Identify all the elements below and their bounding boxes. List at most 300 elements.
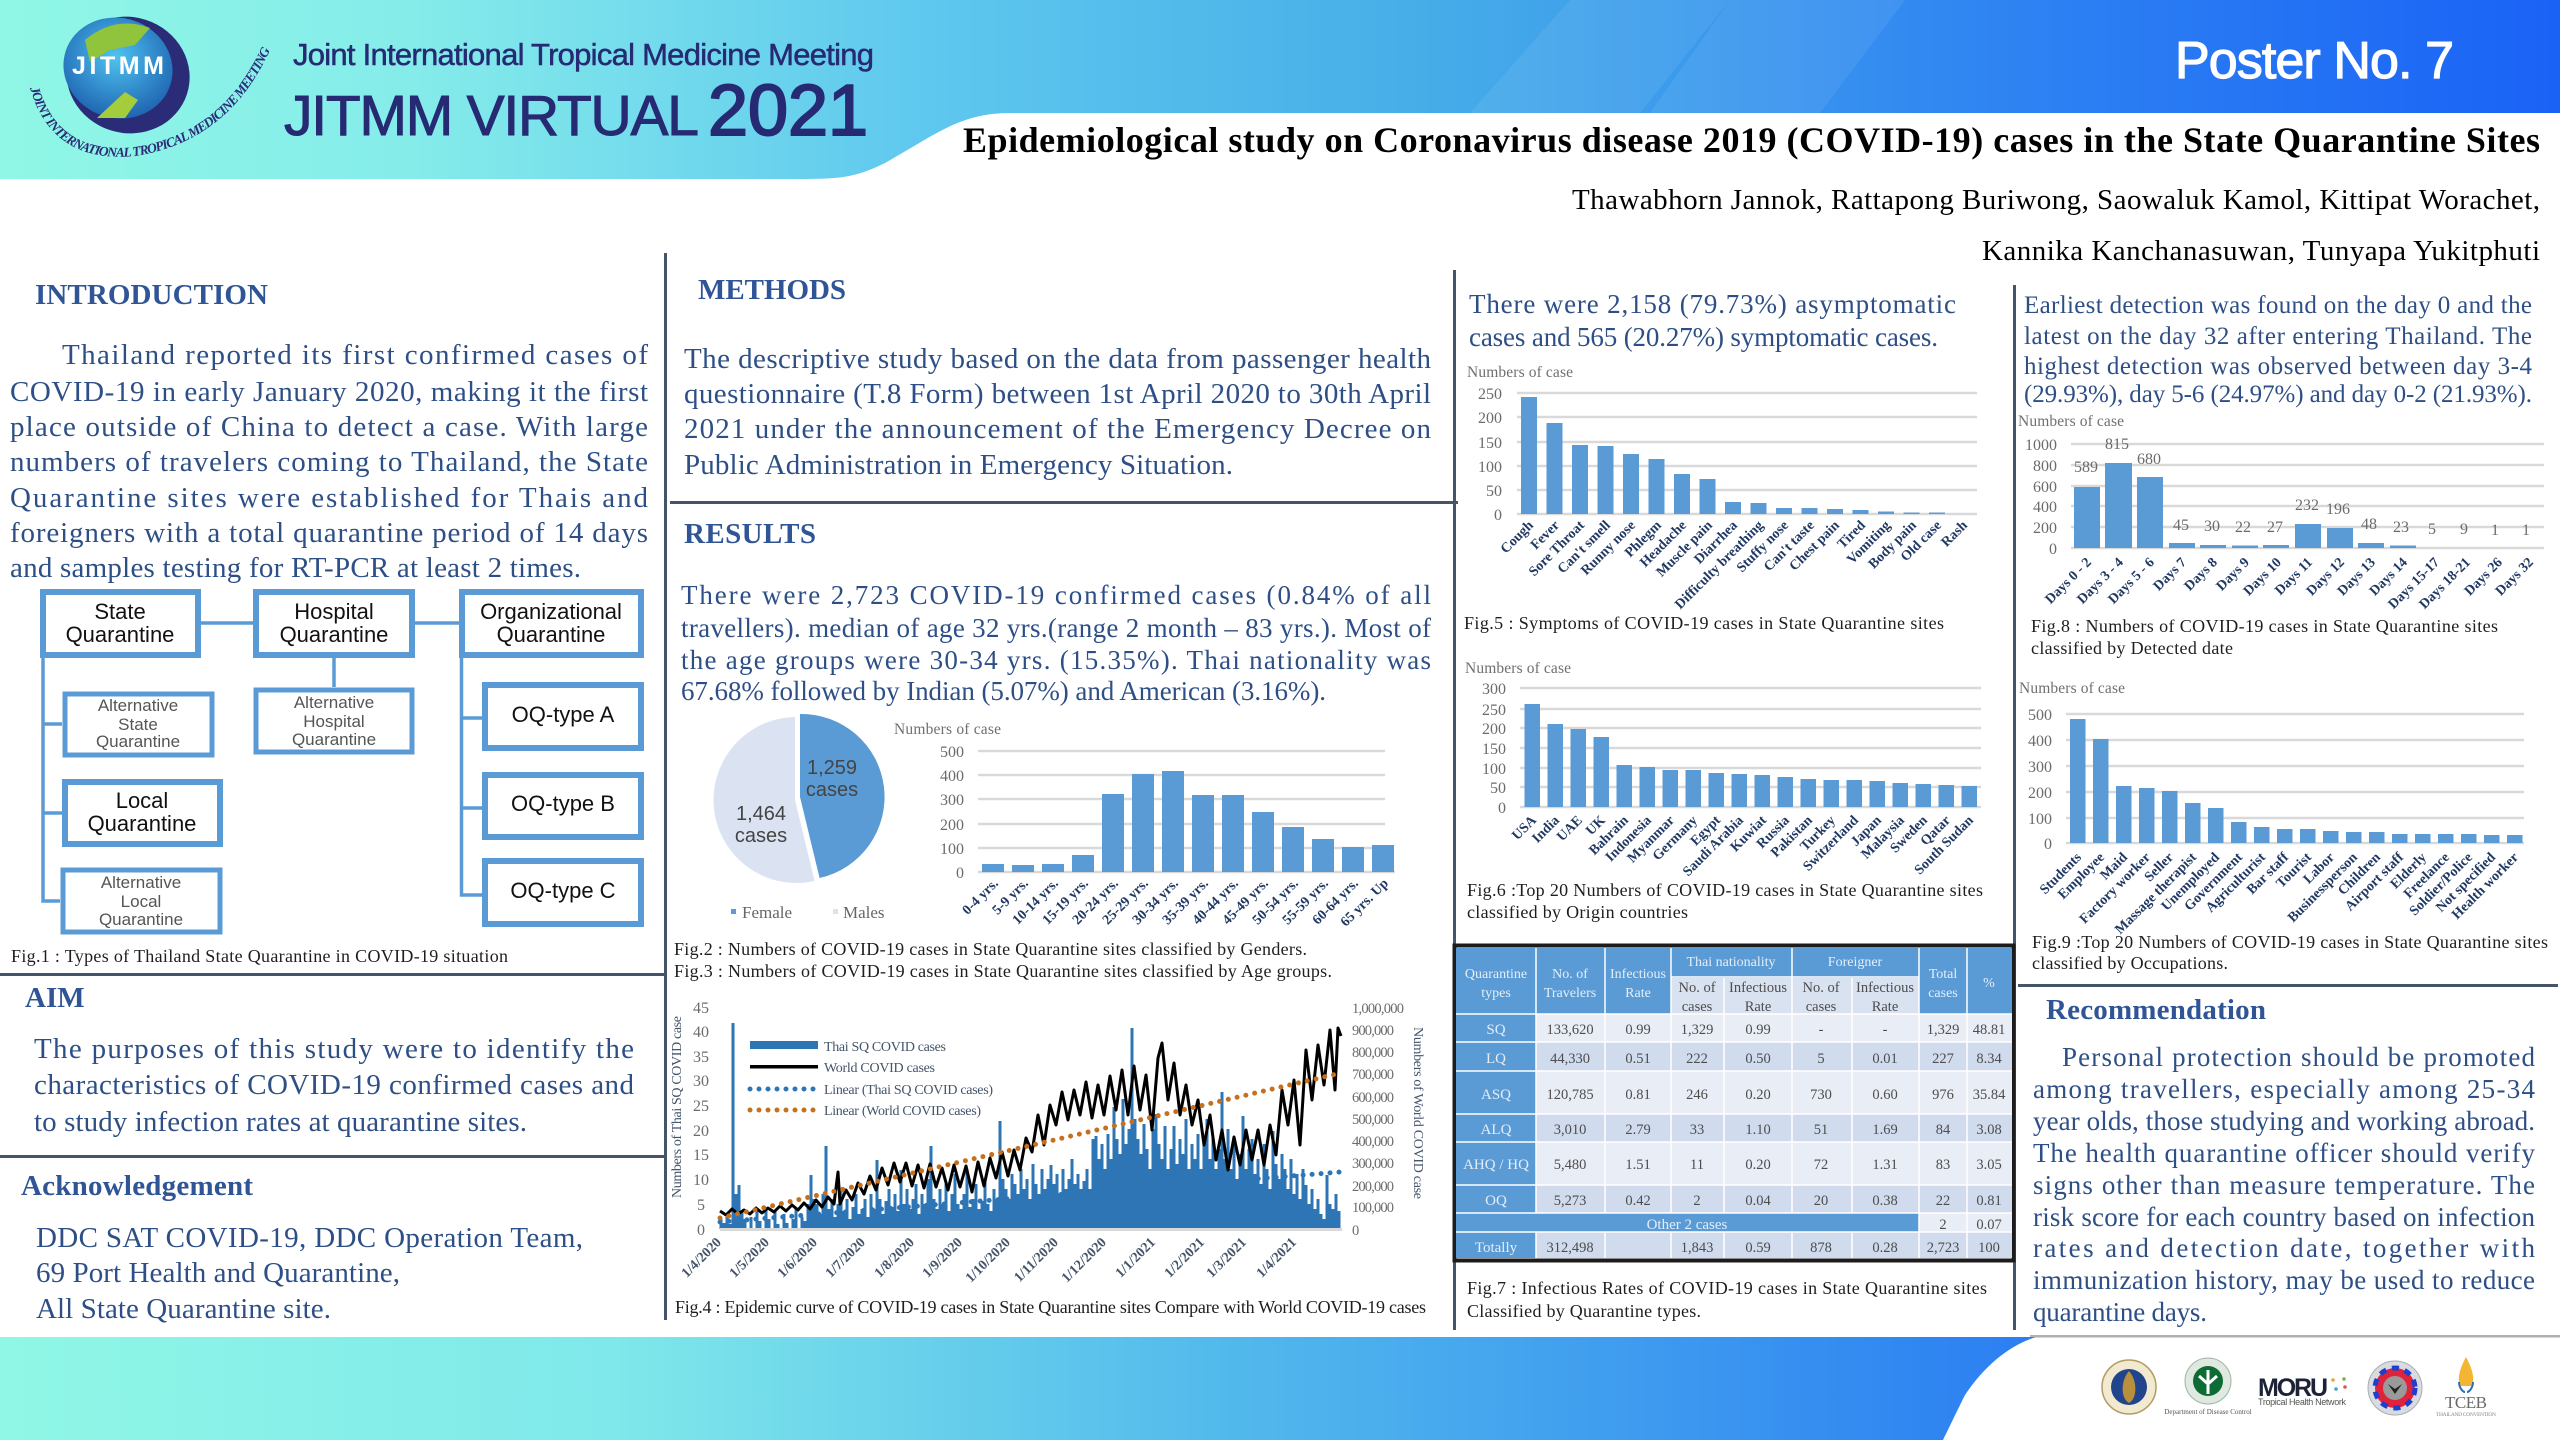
table header: Thai nationality xyxy=(1686,955,1776,970)
chart: symptoms bars: Numbers of case xyxy=(1467,364,1573,381)
table body: 2 xyxy=(1939,1217,1947,1233)
table body: 1,329 xyxy=(1681,1022,1713,1038)
data labels: detected date: 9 xyxy=(2460,521,2468,538)
box: organizational quarantine: Quarantine xyxy=(497,622,605,647)
table body: 72 xyxy=(1814,1157,1828,1173)
axis: right ticks: 700,000 xyxy=(1352,1067,1394,1083)
text: introduction body xyxy=(10,339,648,584)
panel: recommendation xyxy=(2033,994,2536,1327)
chart: origin countries bars: USA xyxy=(1509,813,1540,844)
axis: right ticks: 800,000 xyxy=(1352,1045,1394,1061)
chart: origin countries bars: Turkey xyxy=(1798,813,1839,854)
table header: No. of xyxy=(1552,967,1588,982)
bars: Thai SQ cases xyxy=(721,1023,1339,1229)
chart: symptoms bars: 0 xyxy=(1494,507,1502,524)
axis: left ticks: 0 xyxy=(697,1222,705,1239)
table body: 51 xyxy=(1814,1122,1828,1138)
authors xyxy=(1572,184,2540,267)
axis: left ticks: 15 xyxy=(693,1147,709,1164)
table body: 2.79 xyxy=(1625,1122,1651,1138)
axis: right ticks: 500,000 xyxy=(1352,1112,1394,1128)
chart: origin countries bars: 150 xyxy=(1482,741,1506,758)
table body: 0.51 xyxy=(1625,1051,1651,1067)
axis: left ticks: 10 xyxy=(693,1172,709,1189)
chart: symptoms bars: 150 xyxy=(1478,435,1502,452)
table body: 84 xyxy=(1936,1122,1951,1138)
chart: age group bars: 30-34 yrs. xyxy=(1130,876,1182,928)
box: alternative local quarantine: Local xyxy=(121,892,161,911)
chart: age group bars: 60-64 yrs. xyxy=(1310,876,1362,928)
box: alternative local quarantine xyxy=(63,870,220,932)
chart: symptoms bars: 250 xyxy=(1478,386,1502,403)
chart: origin countries bars: Japan xyxy=(1848,813,1885,850)
bars: dense base of Thai SQ cases xyxy=(1003,1168,1341,1229)
text: recommendation body xyxy=(2033,1042,2536,1327)
chart: gender pie: 1,259 xyxy=(807,757,857,779)
box: local quarantine xyxy=(65,782,220,844)
table: infection rates: Infectious xyxy=(1856,980,1914,996)
text: methods body: Public Administration in Emergency Situation. xyxy=(684,449,1233,481)
chart: occupations bars: Seller xyxy=(2142,850,2177,885)
chart: occupations bars: 500 xyxy=(2028,707,2052,724)
panel: introduction xyxy=(10,279,648,966)
chart: origin countries bars: 50 xyxy=(1490,780,1506,797)
table body: 0.99 xyxy=(1625,1022,1651,1038)
data labels: detected date: 45 xyxy=(2173,517,2189,534)
text: detection summary: latest on the day 32 after entering Thailand. The xyxy=(2024,323,2532,350)
table body: 0.81 xyxy=(1625,1087,1651,1103)
chart: symptoms bars: Old case xyxy=(1898,518,1945,565)
data labels: detected date: 27 xyxy=(2267,519,2283,536)
chart: origin countries bars: Kuwiat xyxy=(1728,813,1770,855)
chart: occupations bars: Factory worker xyxy=(2077,850,2154,927)
table row labels: LQ xyxy=(1486,1051,1506,1067)
chart: detected date bars: Days 7 xyxy=(2151,555,2190,594)
trend: Thai SQ linear xyxy=(720,1172,1341,1222)
diagram: quarantine types xyxy=(43,592,641,932)
table body: 20 xyxy=(1814,1193,1828,1209)
text: recommendation body: The health quarantine officer should verify xyxy=(2033,1138,2536,1168)
table body: 246 xyxy=(1686,1087,1708,1103)
chart: origin countries bars: Switzerland xyxy=(1801,813,1862,874)
panel: symptoms xyxy=(1454,289,2014,1321)
legend: epidemic curve: Linear (World COVID cases) xyxy=(824,1104,981,1119)
chart: detected date bars: Days 5 - 6 xyxy=(2106,555,2158,607)
box: alternative hospital quarantine xyxy=(256,690,412,752)
chart: origin countries bars: Numbers of case xyxy=(1465,660,1571,677)
text: recommendation body: risk score for each country based on infection xyxy=(2033,1202,2536,1232)
chart: age group bars: 400 xyxy=(940,768,964,785)
chart: origin countries bars: 100 xyxy=(1482,761,1506,778)
axis: date labels: 1/3/2021 xyxy=(1204,1235,1250,1281)
chart: age group bars: 5-9 yrs. xyxy=(990,876,1032,918)
box: state quarantine: State xyxy=(94,599,146,624)
caption: fig 6: classified by Origin countries xyxy=(1467,902,1688,922)
data labels: detected date: 196 xyxy=(2326,501,2350,518)
text: recommendation body: Personal protection should be promoted xyxy=(2062,1042,2536,1072)
table body: 0.20 xyxy=(1745,1157,1771,1173)
chart: origin countries bars: Myanmar xyxy=(1625,813,1678,866)
chart: occupations bars: Airport staff xyxy=(2343,850,2407,914)
chart: origin countries bars: UAE xyxy=(1554,813,1586,845)
table body xyxy=(1546,1022,2006,1256)
axis: left ticks xyxy=(693,1000,709,1239)
text: acknowledgement body: All State Quarantine site. xyxy=(36,1293,331,1325)
table: infection rates xyxy=(1454,946,2014,1260)
table body: 8.34 xyxy=(1976,1051,2002,1067)
chart: detected date bars: Days 8 xyxy=(2182,555,2221,594)
table body: 0.20 xyxy=(1745,1087,1771,1103)
chart: occupations bars: Elderly xyxy=(2388,850,2430,892)
table body: 48.81 xyxy=(1973,1022,2005,1038)
chart: origin countries bars: Germany xyxy=(1650,813,1701,864)
table body: 22 xyxy=(1936,1193,1950,1209)
table body: 2 xyxy=(1693,1193,1701,1209)
table body: 0.04 xyxy=(1745,1193,1771,1209)
text: recommendation body: among travellers, especially among 25-34 xyxy=(2033,1074,2536,1104)
chart: origin countries bars: 250 xyxy=(1482,702,1506,719)
data labels: detected date: 1 xyxy=(2491,522,2499,539)
table body: 0.07 xyxy=(1976,1217,2002,1233)
box: OQ-type A: OQ-type A xyxy=(512,702,615,727)
table body: 312,498 xyxy=(1546,1240,1594,1256)
chart: gender pie: 1,464 xyxy=(736,803,786,825)
chart: origin countries bars: Indonesia xyxy=(1603,813,1655,865)
caption: fig 8: Fig.8 : Numbers of COVID-19 cases in State Quarantine sites xyxy=(2031,616,2498,636)
data labels: detected date: 232 xyxy=(2295,497,2319,514)
table body: 3.08 xyxy=(1976,1122,2002,1138)
table body: 33 xyxy=(1690,1122,1704,1138)
caption: fig 7: Fig.7 : Infectious Rates of COVID-19 cases in State Quarantine sites xyxy=(1467,1278,1987,1298)
legend: gender: Males xyxy=(843,903,885,922)
chart: detected date bars: Days 9 xyxy=(2214,555,2253,594)
caption: fig 8: classified by Detected date xyxy=(2031,638,2233,658)
chart: symptoms bars: Body pain xyxy=(1866,518,1920,572)
table body: 730 xyxy=(1810,1087,1832,1103)
caption: figs 2 and 3: Fig.3 : Numbers of COVID-19 cases in State Quarantine sites classified by Age groups. xyxy=(674,961,1332,981)
table body: 120,785 xyxy=(1546,1087,1594,1103)
table body: 0.28 xyxy=(1872,1240,1898,1256)
chart: age group bars: 40-44 yrs. xyxy=(1190,876,1242,928)
table header: Total xyxy=(1929,967,1957,982)
chart: age group bars: 50-54 yrs. xyxy=(1250,876,1302,928)
chart: age group bars: 0 xyxy=(956,865,964,882)
chart: age group bars: 0-4 yrs. xyxy=(960,876,1002,918)
logo: TCEB: THAILAND CONVENTION xyxy=(2436,1412,2496,1418)
caption: fig 1: Fig.1 : Types of Thailand State Quarantine in COVID-19 situation xyxy=(11,946,508,966)
table header: types xyxy=(1481,986,1511,1001)
box: alternative hospital quarantine: Hospital xyxy=(303,712,365,731)
chart: origin countries bars: 200 xyxy=(1482,721,1506,738)
axis: right ticks: 300,000 xyxy=(1352,1156,1394,1172)
table body: 1,329 xyxy=(1927,1022,1959,1038)
legend: gender: Female xyxy=(742,903,792,922)
chart: age group bars xyxy=(894,721,1395,930)
box: alternative state quarantine: Alternative xyxy=(98,696,178,715)
text: recommendation body: year olds, those studying and working abroad. xyxy=(2033,1106,2535,1136)
box: hospital quarantine: Hospital xyxy=(294,599,374,624)
table body: 976 xyxy=(1932,1087,1954,1103)
chart: detected date bars: Days 13 xyxy=(2335,555,2379,599)
text: acknowledgement body: DDC SAT COVID-19, DDC Operation Team, xyxy=(36,1222,583,1254)
table body: 0.50 xyxy=(1745,1051,1771,1067)
data labels: detected date: 48 xyxy=(2361,516,2377,533)
table row labels: AHQ / HQ xyxy=(1463,1157,1529,1173)
axis: left ticks: 45 xyxy=(693,1000,709,1017)
text: aim body: to study infection rates at quarantine sites. xyxy=(34,1106,527,1138)
chart: occupations bars: 300 xyxy=(2028,759,2052,776)
caption: fig 9: Fig.9 :Top 20 Numbers of COVID-19 cases in State Quarantine sites xyxy=(2032,932,2548,952)
chart: detected date bars: Days 3 - 4 xyxy=(2075,555,2127,607)
table body: 35.84 xyxy=(1973,1087,2006,1103)
table body: 100 xyxy=(1978,1240,2000,1256)
chart: symptoms bars: Stuffy nose xyxy=(1734,518,1792,576)
caption: fig 9: classified by Occupations. xyxy=(2032,953,2228,973)
box: OQ-type C xyxy=(485,861,641,924)
event title: JITMM VIRTUAL xyxy=(284,84,699,148)
chart: symptoms bars: Vomiting xyxy=(1845,518,1894,568)
chart: occupations bars: Employee xyxy=(2055,850,2108,903)
text: recommendation body: quarantine days. xyxy=(2033,1297,2207,1327)
chart: detected date bars: 600 xyxy=(2033,479,2057,496)
table header xyxy=(1465,955,1995,1001)
chart: occupations bars: Not specified xyxy=(2433,850,2499,916)
axis: date labels: 1/6/2020 xyxy=(775,1235,821,1281)
chart: origin countries bars: Egypt xyxy=(1688,813,1724,849)
chart: detected date bars: 800 xyxy=(2033,458,2057,475)
box: alternative hospital quarantine: Alternative xyxy=(294,693,374,712)
table row labels: ALQ xyxy=(1481,1122,1512,1138)
chart: occupations bars xyxy=(2019,680,2524,938)
table header: Infectious xyxy=(1610,967,1666,982)
box: organizational quarantine: Organizational xyxy=(480,599,622,624)
chart: symptoms bars: Can't smell xyxy=(1555,518,1614,577)
table: infection rates: cases xyxy=(1682,999,1713,1015)
table body: 44,330 xyxy=(1550,1051,1590,1067)
chart: symptoms bars: Rash xyxy=(1939,518,1971,550)
axis: right ticks: 0 xyxy=(1352,1223,1359,1239)
poster number: Poster No. 7 xyxy=(2175,32,2454,90)
table body: 83 xyxy=(1936,1157,1950,1173)
axis: date labels: 1/12/2020 xyxy=(1059,1235,1110,1286)
chart: occupations bars: Health worker xyxy=(2449,850,2522,923)
axis: left ticks: 5 xyxy=(697,1197,705,1214)
axis: right ticks: 600,000 xyxy=(1352,1090,1394,1106)
text: introduction body: COVID-19 in early January 2020, making it the first xyxy=(10,376,648,408)
caption: fig 7 xyxy=(1467,1278,1987,1321)
legend: epidemic curve xyxy=(750,1040,993,1119)
chart: detected date bars: Days 18-21 xyxy=(2417,555,2474,612)
chart: symptoms bars: Chest pain xyxy=(1787,518,1843,574)
chart: origin countries bars xyxy=(1465,660,1981,880)
table body: - xyxy=(1819,1022,1824,1038)
heading: recommendation: Recommendation xyxy=(2046,994,2266,1026)
logo: department seal xyxy=(2164,1358,2252,1416)
event year: 2021 xyxy=(708,71,868,151)
box: local quarantine: Local xyxy=(116,788,168,813)
axis: date labels: 1/4/2020 xyxy=(679,1235,725,1281)
chart: age group bars: 45-49 yrs. xyxy=(1220,876,1272,928)
text: results body: travellers). median of age 32 yrs.(range 2 month – 83 yrs.). Most of xyxy=(681,613,1431,643)
table body: - xyxy=(1883,1022,1888,1038)
chart: occupations bars: 400 xyxy=(2028,733,2052,750)
chart: detected date bars: Days 32 xyxy=(2493,555,2537,599)
chart: origin countries bars: South Sudan xyxy=(1912,813,1977,878)
data labels: detected date: 1 xyxy=(2522,522,2530,539)
text: methods body: questionnaire (T.8 Form) between 1st April 2020 to 30th April xyxy=(684,378,1431,410)
table body: 1,843 xyxy=(1681,1240,1713,1256)
table row labels: ASQ xyxy=(1481,1087,1511,1103)
chart: age group bars: Numbers of case xyxy=(894,721,1001,738)
axis: right ticks: 200,000 xyxy=(1352,1179,1394,1195)
table body: 1.10 xyxy=(1745,1122,1771,1138)
data labels: detected date: 22 xyxy=(2235,519,2251,536)
logo: MORU: MORU xyxy=(2258,1374,2328,1402)
chart: age group bars: 35-39 yrs. xyxy=(1160,876,1212,928)
text: acknowledgement body xyxy=(36,1222,583,1325)
chart: age group bars: 500 xyxy=(940,744,964,761)
axis: right ticks: 900,000 xyxy=(1352,1023,1394,1039)
logo: MORU: Tropical Health Network xyxy=(2258,1397,2346,1407)
box: alternative local quarantine: Quarantine xyxy=(99,910,183,929)
data labels: detected date: 23 xyxy=(2393,519,2409,536)
chart: detected date bars xyxy=(2018,413,2544,612)
heading: aim: AIM xyxy=(25,982,85,1014)
box: state quarantine: Quarantine xyxy=(66,622,174,647)
axis: left ticks: 20 xyxy=(693,1123,709,1140)
table body: 0.99 xyxy=(1745,1022,1771,1038)
box: OQ-type A xyxy=(485,685,641,748)
text: methods body: 2021 under the announcement of the Emergency Decree on xyxy=(684,413,1432,445)
caption: fig 4: Fig.4 : Epidemic curve of COVID-19 cases in State Quarantine sites Compare with World COVID-19 cases xyxy=(675,1297,1426,1317)
table body: 222 xyxy=(1686,1051,1708,1067)
data labels: detected date: 680 xyxy=(2137,451,2161,468)
box: alternative state quarantine xyxy=(65,694,212,755)
axis: date labels: 1/10/2020 xyxy=(963,1235,1014,1286)
box: hospital quarantine: Quarantine xyxy=(280,622,388,647)
chart: symptoms bars: 50 xyxy=(1486,483,1502,500)
data labels: detected date: 589 xyxy=(2074,459,2098,476)
chart: symptoms bars: Difficulty breathing xyxy=(1673,518,1767,613)
table: infection rates: Rate xyxy=(1872,999,1898,1015)
chart: age group bars: 20-24 yrs. xyxy=(1070,876,1122,928)
panel: methods xyxy=(684,274,1432,481)
table body: 1.51 xyxy=(1625,1157,1651,1173)
chart: symptoms bars: 200 xyxy=(1478,410,1502,427)
chart: symptoms bars: Muscle pain xyxy=(1654,518,1716,580)
logo: JITMM globe: JITMM xyxy=(72,52,164,80)
chart: occupations bars: 0 xyxy=(2044,836,2052,853)
chart: detected date bars: Days 0 - 2 xyxy=(2043,555,2095,607)
footer banner xyxy=(0,1335,2560,1440)
axis: right ticks: 1,000,000 xyxy=(1352,1001,1404,1017)
table row labels: OQ xyxy=(1485,1193,1507,1209)
text: introduction body: and samples testing for RT-PCR at least 2 times. xyxy=(10,552,581,584)
heading: results: RESULTS xyxy=(684,518,816,550)
text: introduction body: Quarantine sites were established for Thais and xyxy=(10,482,648,514)
chart: symptoms bars: Fever xyxy=(1528,518,1563,553)
chart: age group bars: 10-14 yrs. xyxy=(1010,876,1062,928)
chart: age group bars: 200 xyxy=(940,817,964,834)
axis: date labels: 1/7/2020 xyxy=(823,1235,869,1281)
table body: 0.38 xyxy=(1872,1193,1898,1209)
panel: aim xyxy=(25,982,634,1138)
text: methods body: The descriptive study based on the data from passenger health xyxy=(684,343,1432,375)
axis: right ticks: 100,000 xyxy=(1352,1200,1394,1216)
text: introduction body: numbers of travelers coming to Thailand, the State xyxy=(10,446,648,478)
table row labels: Totally xyxy=(1475,1240,1518,1256)
panel: detection and occupations xyxy=(2018,292,2548,973)
table body: 5,480 xyxy=(1554,1157,1586,1173)
box: alternative hospital quarantine: Quarantine xyxy=(292,730,376,749)
table body: 3.05 xyxy=(1976,1157,2002,1173)
heading: introduction: INTRODUCTION xyxy=(35,279,268,311)
table body: 5 xyxy=(1817,1051,1825,1067)
chart: origin countries bars: 300 xyxy=(1482,681,1506,698)
table: infection rates: Infectious xyxy=(1729,980,1787,996)
axis title: right: Numbers of World COVID case xyxy=(1410,1027,1425,1199)
table: infection rates: Rate xyxy=(1745,999,1771,1015)
chart: symptoms bars: Can't taste xyxy=(1761,518,1818,575)
text: detection summary: (29.93%), day 5-6 (24.97%) and day 0-2 (21.93%). xyxy=(2024,381,2532,408)
chart: occupations bars: Soldier/Police xyxy=(2407,850,2476,919)
trend: world linear xyxy=(720,1073,1341,1218)
logo: JITMM globe: JOINT INTERNATIONAL TROPICAL MEDICINE MEETING xyxy=(30,46,270,157)
table body: 1.69 xyxy=(1872,1122,1898,1138)
box: state quarantine xyxy=(43,592,198,655)
box: OQ-type B: OQ-type B xyxy=(511,791,615,816)
caption: fig 7: Classified by Quarantine types. xyxy=(1467,1301,1701,1321)
table header: Foreigner xyxy=(1828,955,1883,970)
chart: gender pie: cases xyxy=(806,779,858,801)
table body: 2,723 xyxy=(1927,1240,1959,1256)
chart: occupations bars: 200 xyxy=(2028,785,2052,802)
text: detection summary: highest detection was observed between day 3-4 xyxy=(2024,353,2532,380)
chart: gender pie xyxy=(714,714,885,922)
table body: 227 xyxy=(1932,1051,1954,1067)
caption: fig 9 xyxy=(2032,932,2548,973)
chart: origin countries bars: Saudi Arabia xyxy=(1680,813,1747,880)
chart: epidemic curve xyxy=(670,1000,1425,1286)
chart: occupations bars: Businessperson xyxy=(2285,850,2361,926)
box: OQ-type B xyxy=(485,775,641,837)
chart: symptoms bars: Headache xyxy=(1637,518,1690,571)
chart: origin countries bars: India xyxy=(1530,813,1563,846)
axis: date labels: 1/2/2021 xyxy=(1162,1235,1208,1281)
caption: figs 2 and 3: Fig.2 : Numbers of COVID-19 cases in State Quarantine sites classified by Genders. xyxy=(674,939,1307,959)
chart: symptoms bars xyxy=(1467,364,1977,613)
chart: symptoms bars: 100 xyxy=(1478,459,1502,476)
logo: TCEB xyxy=(2436,1357,2496,1418)
text: detection summary: Earliest detection was found on the day 0 and the xyxy=(2024,292,2532,319)
chart: occupations bars: Agriculturist xyxy=(2203,850,2269,916)
box: OQ-type C: OQ-type C xyxy=(510,878,616,903)
header banner xyxy=(0,0,2560,179)
box: organizational quarantine xyxy=(462,592,641,655)
text: introduction body: Thailand reported its first confirmed cases of xyxy=(62,339,648,371)
table body: 3,010 xyxy=(1554,1122,1586,1138)
caption: fig 5: Fig.5 : Symptoms of COVID-19 cases in State Quarantine sites xyxy=(1464,613,1944,633)
legend: gender xyxy=(731,903,885,922)
chart: origin countries bars: 0 xyxy=(1498,800,1506,817)
chart: symptoms bars: Phlegm xyxy=(1622,518,1665,561)
chart: origin countries bars: UK xyxy=(1583,813,1609,839)
axis: date labels: 1/9/2020 xyxy=(920,1235,966,1281)
chart: occupations bars: Maid xyxy=(2098,850,2131,883)
axis: right ticks: 400,000 xyxy=(1352,1134,1394,1150)
axis: date labels: 1/11/2020 xyxy=(1012,1235,1062,1285)
table body: 0.81 xyxy=(1976,1193,2002,1209)
